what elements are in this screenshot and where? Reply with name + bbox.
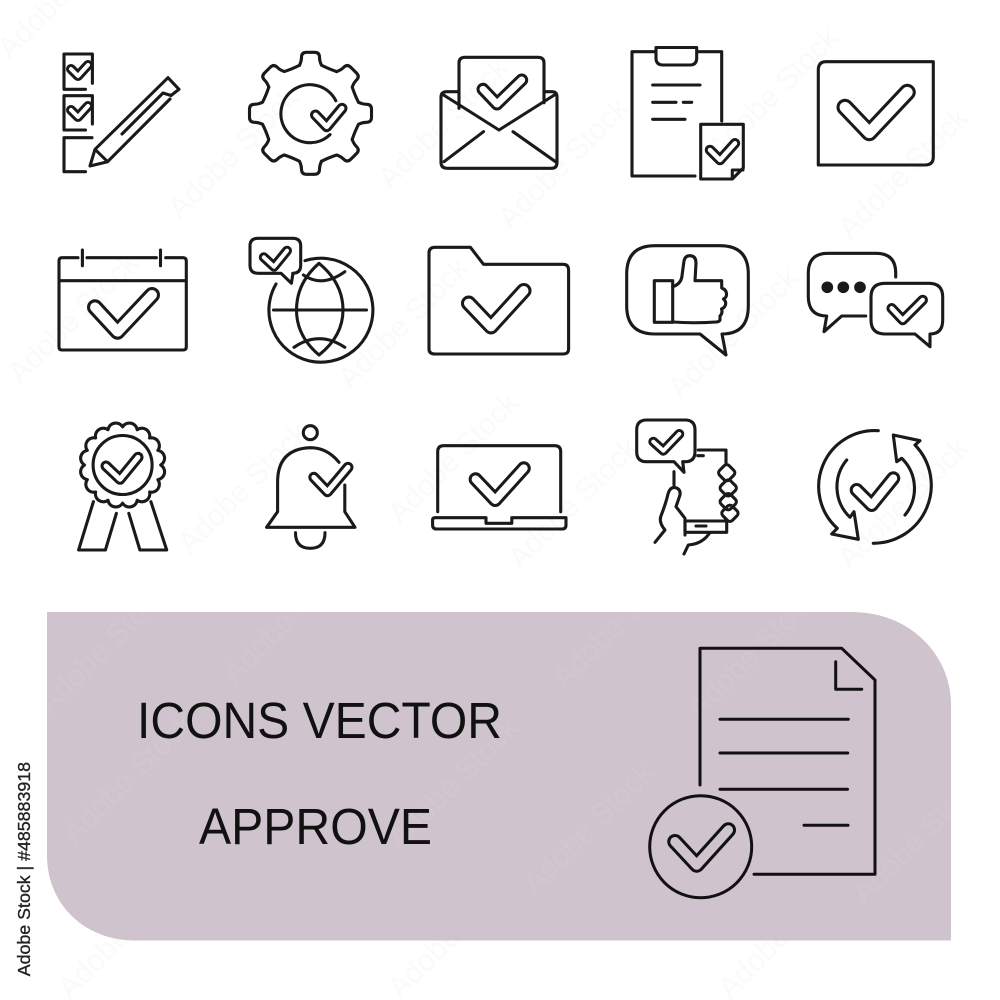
panel watermark: Adobe Stock bbox=[547, 551, 691, 695]
icon: folder with check bbox=[429, 247, 569, 354]
icon: gear with check bbox=[249, 52, 372, 175]
watermark pattern: Adobe Stock bbox=[832, 101, 976, 245]
watermark pattern: Adobe Stock bbox=[492, 91, 636, 235]
icon: sync arrows with check bbox=[819, 431, 931, 543]
watermark pattern: Adobe Stock bbox=[162, 81, 306, 225]
watermark pattern: Adobe Stock bbox=[372, 51, 516, 195]
icon: chat bubbles with check bbox=[808, 253, 943, 347]
icon: envelope with check bbox=[441, 57, 557, 168]
icon: bell with check bbox=[267, 426, 355, 548]
panel watermark: Adobe Stock bbox=[682, 581, 826, 725]
icon: laptop with check bbox=[433, 446, 566, 529]
icon: document with approved badge bbox=[650, 648, 875, 898]
watermark pattern: Adobe Stock bbox=[2, 246, 146, 390]
panel watermark: Adobe Stock bbox=[847, 766, 991, 910]
icon: rosette with ribbons bbox=[79, 423, 167, 550]
panel watermark: Adobe Stock bbox=[32, 576, 176, 720]
panel watermark bbox=[32, 546, 991, 910]
watermark pattern: Adobe Stock bbox=[832, 431, 976, 575]
panel watermark: Adobe Stock bbox=[217, 546, 361, 690]
heading: approve: APPROVE bbox=[199, 798, 432, 855]
icon: clipboard with document bbox=[632, 48, 743, 179]
panel watermark: Adobe Stock bbox=[517, 756, 661, 900]
panel watermark: Adobe Stock bbox=[382, 711, 526, 855]
icon: speech bubble with thumbs up bbox=[627, 246, 748, 355]
side credit: Adobe Stock | #485883918 bbox=[14, 762, 34, 976]
watermark pattern: Adobe Stock bbox=[172, 416, 316, 560]
watermark pattern: Adobe Stock bbox=[332, 251, 476, 395]
icon: hand holding phone with bubble bbox=[637, 420, 739, 554]
icon: checklist and pencil bbox=[64, 54, 179, 172]
panel: approve banner bbox=[47, 612, 951, 940]
watermark pattern: Adobe Stock bbox=[382, 386, 526, 530]
icon: square check bbox=[818, 62, 933, 165]
watermark pattern: Adobe Stock bbox=[502, 431, 646, 575]
heading: icons vector: ICONS VECTOR bbox=[137, 692, 502, 749]
watermark pattern: Adobe Stock bbox=[662, 261, 806, 405]
panel watermark: Adobe Stock bbox=[57, 706, 201, 850]
icon: globe with bubble bbox=[250, 238, 373, 362]
watermark pattern: Adobe Stock bbox=[702, 21, 846, 165]
icon: calendar with check bbox=[59, 250, 186, 350]
